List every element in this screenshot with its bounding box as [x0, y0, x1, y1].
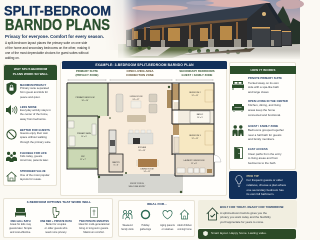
bedroom 3: BEDROOM 3: [189, 135, 201, 137]
panel: ideal for: gatherings: [140, 228, 151, 230]
text: private primary suite: Tucked away on its own: [248, 81, 279, 85]
text: better for guests: BETTER FOR GUESTS: [20, 128, 50, 132]
pantry: [109, 154, 123, 172]
banner: smart layout: [198, 229, 296, 238]
icon: family group: [122, 210, 132, 220]
panel: ideal for: Adult children: [177, 224, 192, 226]
text: better for guests: [20, 128, 51, 144]
option: one hall bath: and cost-effective.: [10, 231, 31, 234]
kitchen counter: [109, 130, 116, 153]
icon: light bulb: [235, 175, 243, 187]
how it works heading: HOW IT WORKS: [250, 68, 276, 72]
option: one bath + private bath: Better for couples: [46, 223, 66, 226]
main wall: [126, 18, 250, 47]
text: private primary suite: PRIVATE PRIMARY SUITE: [248, 77, 282, 80]
intro text: of the home and secondary bedrooms on the other, making it: [5, 46, 90, 50]
icon: toilet and sink: [52, 207, 60, 218]
shrubs: [129, 46, 248, 54]
laundry: 12' x 8': [191, 163, 198, 165]
callout text: A split-bedroom barndo gives you the: [220, 210, 267, 214]
kitchen island: [128, 130, 153, 144]
ideal labels: family visits: [121, 228, 134, 230]
text: stronger value: layouts for resale.: [20, 178, 42, 181]
pro tip heading: PRO TIP: [246, 174, 259, 178]
primary bath: 10' x 9': [81, 136, 88, 138]
text: private primary suite: [248, 77, 282, 94]
ideal labels: Weekend: [122, 224, 133, 226]
text: private primary suite: side with a spa-like bath: [248, 85, 279, 89]
WIC: 12' x 7': [80, 159, 87, 161]
zone label: open living: OPEN LIVING AREA: [127, 70, 153, 73]
pro tip text: [246, 178, 286, 196]
laundry: LAUNDRY / MUDROOM: [184, 159, 205, 162]
title: SPLIT-BEDROOM: [4, 3, 111, 19]
zone label: primary: [76, 70, 98, 77]
option: one bath + private bath: or older guests who: [45, 227, 67, 230]
pro tip text: relatives, choose a plan where: [246, 183, 286, 187]
callout text: [220, 210, 271, 224]
zone label: open living: CONNECTION ZONE: [126, 74, 154, 77]
text: better for guests: Guests enjoy their own: [20, 132, 48, 135]
how it works heading: [230, 66, 296, 74]
panel: ideal for: Aging parents: [160, 224, 175, 226]
bedroom 3: 12' x 12': [192, 138, 199, 140]
option: two private ensuites: TWO PRIVATE ENSUITES: [79, 220, 109, 223]
option: one hall bath: guests later. Simple: [9, 227, 32, 230]
text: less noise: away from bedrooms.: [20, 118, 46, 121]
open living area: [98, 83, 174, 174]
text: maximum privacy: Primary suite separated: [20, 86, 49, 90]
pantry: 6' x 6': [114, 164, 119, 166]
open living area: KITCHEN: [138, 147, 147, 149]
panel: why split-bedroom plans work: [3, 64, 57, 186]
icon: no-entry circle: [6, 129, 17, 140]
text: flexible for life: Kids today, guests: [20, 155, 42, 158]
ground: [118, 44, 300, 58]
example plan banner: EXAMPLE: 3-BEDROOM SPLIT-BEDROOM BARNDO PLAN: [95, 63, 194, 67]
icon: door panel: [90, 207, 98, 218]
icon: family: [6, 152, 17, 162]
text: less noise: Everyday activity stays in: [20, 109, 51, 112]
callout: built for today: [198, 200, 297, 228]
porch: WELCOME ENTRY: [129, 186, 146, 188]
WIC: [67, 148, 98, 169]
icon: two guests: [232, 125, 244, 136]
text: better for guests: through the primary suite.: [20, 141, 51, 144]
bedroom 2: 12' x 12': [192, 95, 199, 97]
option: one hall bath: ONE HALL BATH: [11, 220, 30, 223]
example plan banner: [62, 61, 227, 69]
open living area: 14' x 12': [144, 171, 151, 173]
primary bedroom: [67, 83, 108, 116]
intro text: one of the most dependable choices for guest suites without: [5, 51, 88, 55]
icon: bed: [232, 81, 244, 90]
text: less noise: [20, 106, 51, 121]
icon: bed: [15, 208, 26, 217]
callout text: you'll appreciate for years to come.: [220, 220, 264, 224]
zone label: secondary: GUEST / FAMILY ZONE: [182, 74, 212, 77]
text: flexible for life: [20, 152, 49, 162]
open living area: DINING ROOM: [140, 168, 154, 170]
pro tip text: one secondary bedroom has: [246, 188, 284, 192]
right wing: [275, 22, 292, 46]
text: stronger value: STRONGER VALUE: [20, 170, 46, 172]
text: better for guests: space without walking: [20, 136, 47, 139]
option: two private ensuites: Ideal for multi-generational: [79, 223, 109, 226]
zone label: primary: PRIMARY SUITE: [76, 70, 98, 73]
text: guest zone: Bedrooms grouped together: [248, 128, 284, 132]
text: guest zone: [248, 125, 284, 141]
intro text: A split-bedroom layout places the primary suite on one side: [5, 41, 87, 45]
primary bedroom: 16' x 14': [82, 100, 89, 102]
icon: sofa: [232, 104, 244, 112]
text: flexible for life: FLEXIBLE FOR LIFE: [20, 152, 47, 154]
options heading: 3-BEDROOM OPTIONS THAT WORK WELL: [27, 200, 91, 204]
text: less noise: LESS NOISE: [20, 106, 37, 108]
panel: ideal for: Holiday: [142, 224, 149, 226]
text: maximum privacy: peace and quiet.: [20, 96, 40, 99]
panel heading: [4, 65, 57, 80]
text: open living: [248, 100, 288, 117]
zone label: open living: [126, 70, 154, 77]
title: [4, 3, 111, 34]
primary bath: [67, 116, 98, 148]
text: flexible for life: tomorrow, parents later.: [20, 159, 49, 162]
bedroom 3: [173, 124, 214, 154]
dining table: [136, 159, 159, 167]
icon: heart shield: [162, 210, 172, 220]
intro text: adding on.: [5, 56, 20, 60]
text: easy access: Clear paths from the entry: [248, 152, 281, 156]
panel: ideal for: or relatives: [162, 228, 173, 230]
zone label: primary: (PRIVACY ZONE): [76, 74, 98, 77]
porch: FRONT PORCH: [130, 183, 145, 185]
icon: house: [180, 210, 190, 220]
WIC: WIC: [81, 156, 85, 158]
zone label: secondary: SECONDARY BEDROOMS: [179, 70, 215, 73]
panel: ideal for: [118, 200, 195, 237]
ideal labels: [121, 224, 134, 230]
text: guest zone: and family members.: [248, 137, 275, 141]
trees: [272, 6, 293, 32]
panel: pro tip: [229, 171, 297, 198]
panel heading: WHY SPLIT-BEDROOM: [14, 67, 47, 71]
icon: door: [234, 147, 243, 159]
icon: house with check: [206, 208, 218, 220]
pro tip text: its own full bathroom.: [246, 192, 274, 196]
panel: ideal for: coming home: [177, 228, 192, 230]
option: two private ensuites: Maximum comfort.: [83, 231, 105, 234]
primary bath: PRIMARY BATH: [77, 132, 92, 135]
text: easy access: to living areas and from: [248, 156, 278, 160]
icon: house value: [6, 172, 17, 182]
text: easy access: bedrooms to the bath.: [248, 161, 276, 165]
bath 2: BATH 2: [197, 113, 203, 116]
bath 2: 10' x 5': [197, 117, 204, 119]
text: guest zone: near a hall bath for guests: [248, 133, 281, 137]
option: one bath + private bath: need more privacy.: [45, 231, 67, 234]
text: open living: OPEN LIVING IN THE CENTER: [248, 100, 288, 103]
text: guest zone: GUEST / FAMILY ZONE: [248, 125, 278, 128]
ideal for heading: IDEAL FOR...: [147, 202, 167, 206]
laundry: [175, 155, 214, 175]
panel: how it works: [229, 62, 296, 170]
windows: [132, 31, 138, 39]
open living area: 24' x 17': [133, 99, 140, 101]
text: less noise: the center of the home,: [20, 113, 48, 116]
gable: [247, 3, 282, 47]
sofa group: [116, 90, 172, 122]
text: maximum privacy: [20, 84, 49, 99]
option: two private ensuites: [78, 207, 110, 234]
text: open living: connected and functional.: [248, 113, 281, 117]
text: open living: Kitchen, dining, and living: [248, 103, 281, 107]
bedroom 2: BEDROOM 2: [189, 92, 201, 94]
panel heading: PLANS WORK SO WELL: [13, 72, 48, 76]
pro tip text: For frequent guests or older: [246, 178, 283, 182]
intro text: [5, 41, 90, 60]
panel: 3-bedroom options: [3, 198, 113, 238]
bath 2: [178, 110, 214, 124]
walls: [67, 83, 214, 176]
icon: speaker: [6, 105, 18, 115]
posts: [132, 22, 238, 40]
icon: shield privacy: [6, 82, 16, 95]
text: open living: areas keep the home: [248, 108, 275, 112]
option: one hall bath: [9, 208, 32, 234]
primary bedroom: PRIMARY BEDROOM: [76, 96, 95, 99]
text: maximum privacy: from guest and kids for: [20, 91, 48, 94]
option: two private ensuites: living or long-term guests.: [79, 227, 109, 230]
roof: [126, 3, 267, 31]
callout heading: BUILT FOR TODAY. READY FOR TOMORROW.: [220, 205, 284, 209]
icon: ring: [140, 210, 150, 220]
icon: badge: [203, 231, 208, 236]
hero photo: barndominium at dusk: [114, 0, 304, 58]
option: one bath + private bath: ONE BED + PRIVATE BATH: [40, 220, 72, 223]
option: one bath + private bath: [40, 207, 72, 234]
text: easy access: [248, 148, 282, 165]
porch: [98, 173, 183, 193]
subtitle: Privacy for everyone. Comfort for every season.: [5, 34, 104, 39]
open living area: 20' x 13': [139, 150, 146, 152]
zone label: secondary: [179, 70, 215, 77]
text: private primary suite: and large closet.: [248, 90, 269, 94]
text: maximum privacy: MAXIMUM PRIVACY: [20, 84, 46, 86]
callout text: privacy you want today and the flexibility: [220, 215, 271, 219]
open living area: LIVING ROOM: [130, 96, 143, 98]
title: BARNDO PLANS: [5, 17, 110, 34]
pantry: PANTRY: [112, 161, 120, 164]
text: stronger value: [20, 170, 50, 181]
banner text: Smart layout. Happy home. Lasting value.: [211, 231, 267, 235]
panel: example plan: [60, 62, 227, 196]
text: stronger value: One of the most popular: [20, 174, 50, 176]
text: easy access: EASY ACCESS: [248, 148, 268, 151]
option: one hall bath: Great for kids may: [10, 223, 31, 226]
bedroom 2: [172, 84, 214, 110]
